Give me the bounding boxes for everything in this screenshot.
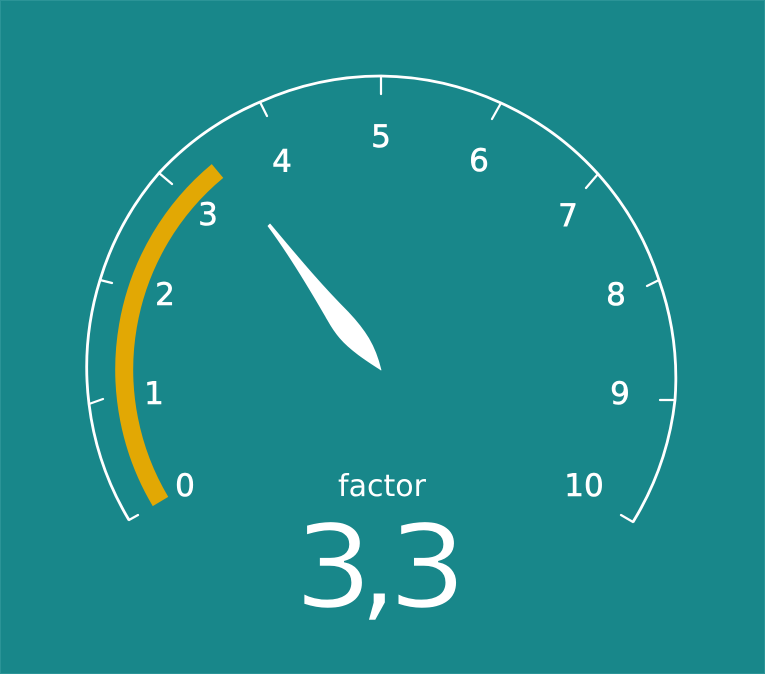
scale labels: 5: [371, 119, 391, 155]
value: 3,3: [294, 501, 467, 635]
scale labels: 7: [558, 198, 578, 234]
scale labels: 9: [610, 376, 630, 412]
scale labels: 2: [155, 277, 175, 313]
gauge tick marks: [89, 76, 675, 522]
scale labels: [144, 119, 630, 504]
scale labels: 10: [564, 468, 604, 504]
scale labels: 8: [606, 277, 626, 313]
factor label: factor: [338, 469, 427, 504]
needle: [268, 224, 381, 370]
progress arc: [124, 171, 218, 502]
scale labels: 0: [175, 468, 195, 504]
scale labels: 4: [272, 144, 292, 180]
scale labels: 1: [144, 376, 164, 412]
gauge scale arc: [87, 76, 676, 522]
scale labels: 6: [469, 143, 489, 179]
scale labels: 3: [198, 197, 218, 233]
